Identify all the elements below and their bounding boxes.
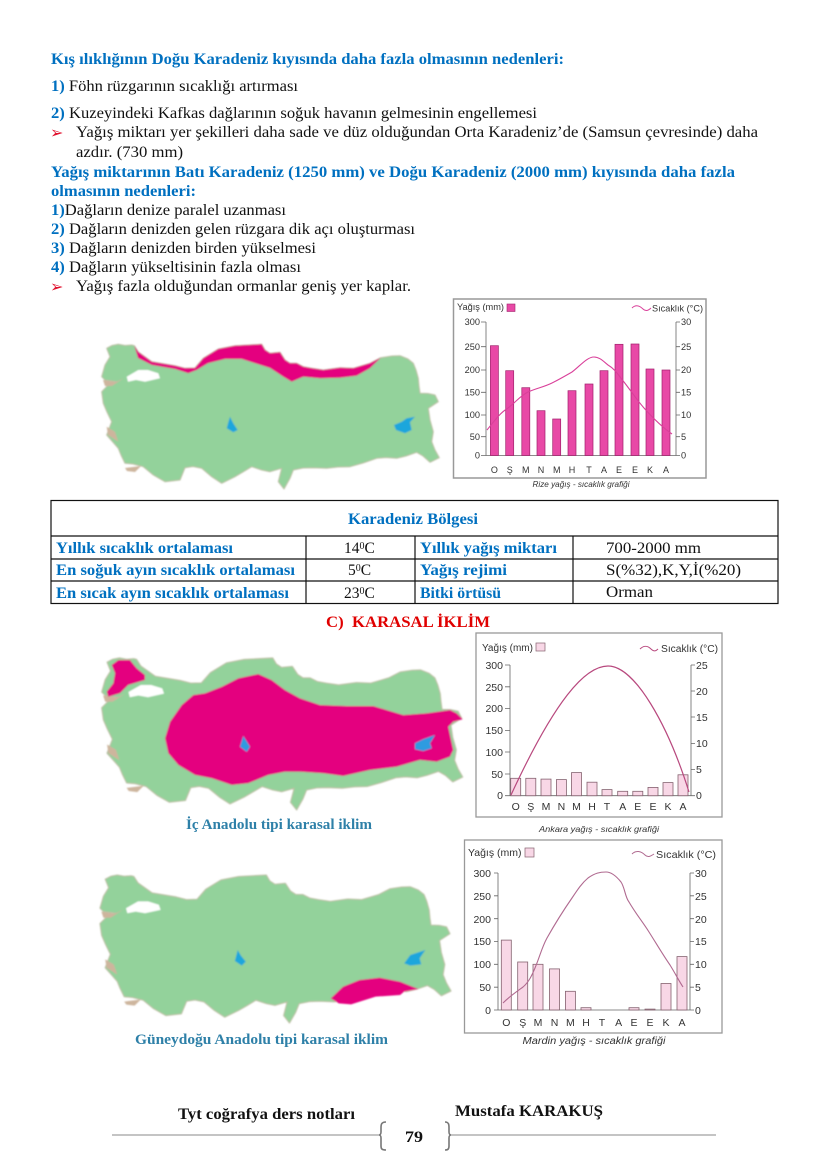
table: Karadeniz Bölgesi: 700-2000 mm: [606, 540, 701, 557]
text block: Orta Karadeniz yağış bullet: [50, 123, 758, 161]
text block: numbered reasons: 4) Dağların yükseltisinin fazla olması: [51, 259, 302, 276]
text block: numbered reasons: 1)Dağların denize paralel uzanması: [51, 202, 287, 219]
chart: Rize yağış sıcaklık grafiği: 10: [681, 410, 691, 420]
chart: Mardin yağış sıcaklık grafiği: E: [630, 1017, 638, 1029]
chart: Ankara yağış sıcaklık grafiği: A: [679, 801, 687, 813]
chart: Mardin yağış sıcaklık grafiği: A: [678, 1017, 686, 1029]
chart: Ankara yağış sıcaklık grafiği: 15: [696, 712, 708, 724]
chart: Rize yağış sıcaklık grafiği: [454, 299, 706, 489]
heading: Doğu Karadeniz kış ılıklığı: Kış ılıklığının Doğu Karadeniz kıyısında daha fazla olmasının nedenleri:: [51, 51, 564, 68]
chart: Rize yağış sıcaklık grafiği: E: [616, 465, 622, 475]
chart: Mardin yağış sıcaklık grafiği: H: [582, 1017, 590, 1029]
chart: Rize yağış sıcaklık grafiği: 30: [681, 317, 691, 327]
table: Karadeniz Bölgesi: Orman: [606, 584, 653, 601]
table: Karadeniz Bölgesi: 14: [344, 540, 360, 557]
footer: author: Mustafa KARAKUŞ: [455, 1103, 603, 1120]
chart: Rize yağış sıcaklık grafiği: Yağış (mm): [457, 302, 504, 312]
map: İç Anadolu karasal iklim: [102, 658, 463, 810]
chart: Rize yağış sıcaklık grafiği: T: [586, 465, 592, 475]
chart: Ankara yağış sıcaklık grafiği: M: [572, 801, 581, 813]
chart: Ankara yağış sıcaklık grafiği: Sıcaklık (°C): [661, 644, 718, 655]
text block: Föhn and Kafkas reasons: 2) Kuzeyindeki Kafkas dağlarının soğuk havanın gelmesinin engellemesi: [51, 105, 538, 122]
chart: Mardin yağış sıcaklık grafiği: 150: [473, 936, 491, 948]
text block: Orta Karadeniz yağış bullet: ➢: [50, 123, 63, 142]
heading: Karasal iklim: C) KARASAL İKLİM: [326, 612, 490, 631]
chart: Rize yağış sıcaklık grafiği: O: [491, 465, 498, 475]
chart: Ankara yağış sıcaklık grafiği: E: [634, 801, 641, 813]
chart: Mardin yağış sıcaklık grafiği: K: [662, 1017, 670, 1029]
chart: Ankara yağış sıcaklık grafiği: 10: [696, 738, 708, 750]
chart: Ankara yağış sıcaklık grafiği: N: [558, 801, 565, 813]
chart: Mardin yağış sıcaklık grafiği: Ş: [519, 1017, 526, 1029]
chart: Mardin yağış sıcaklık grafiği: 250: [473, 891, 491, 903]
chart: Ankara yağış sıcaklık grafiği: 20: [696, 686, 708, 698]
chart: Ankara yağış sıcaklık grafiği: K: [664, 801, 672, 813]
chart: Mardin yağış sıcaklık grafiği: M: [534, 1017, 542, 1029]
chart: Ankara yağış sıcaklık grafiği: 50: [491, 769, 503, 781]
table: Karadeniz Bölgesi: Karadeniz Bölgesi: [348, 511, 479, 528]
chart: Ankara yağış sıcaklık grafiği: M: [542, 801, 550, 813]
chart: Rize yağış sıcaklık grafiği: 50: [470, 432, 480, 442]
chart: Mardin yağış sıcaklık grafiği: 50: [479, 982, 491, 994]
table: Karadeniz Bölgesi: Yıllık sıcaklık ortalaması: [56, 540, 234, 557]
chart: Mardin yağış sıcaklık grafiği: A: [615, 1017, 622, 1029]
table: Karadeniz Bölgesi: Yıllık yağış miktarı: [420, 540, 558, 557]
table: Karadeniz Bölgesi: 0: [360, 586, 364, 597]
chart: Mardin yağış sıcaklık grafiği: 15: [695, 936, 707, 948]
chart: Mardin yağış sıcaklık grafiği: T: [599, 1017, 606, 1029]
table: Karadeniz Bölgesi: 5: [348, 562, 356, 579]
chart: Ankara yağış sıcaklık grafiği: 0: [497, 790, 503, 802]
chart: Mardin yağış sıcaklık grafiği: [464, 840, 722, 1047]
table: Karadeniz Bölgesi: Yağış rejimi: [420, 562, 508, 579]
table: Karadeniz Bölgesi: 0: [356, 563, 361, 574]
chart: Mardin yağış sıcaklık grafiği: 30: [695, 868, 707, 880]
chart: Mardin yağış sıcaklık grafiği: Mardin yağış - sıcaklık grafiği: [522, 1036, 666, 1047]
chart: Ankara yağış sıcaklık grafiği: 300: [485, 660, 503, 672]
chart: Rize yağış sıcaklık grafiği: E: [632, 465, 638, 475]
chart: Rize yağış sıcaklık grafiği: 0: [681, 450, 686, 460]
text block: Föhn and Kafkas reasons: 1) Föhn rüzgarının sıcaklığı artırması: [51, 78, 299, 95]
chart: Ankara yağış sıcaklık grafiği: 25: [696, 660, 708, 672]
table: Karadeniz Bölgesi: [51, 500, 778, 604]
text block: Orta Karadeniz yağış bullet: Yağış miktarı yer şekilleri daha sade ve düz olduğundan Orta Karadeniz’de (Samsun çevresinde) daha: [76, 124, 758, 141]
chart: Mardin yağış sıcaklık grafiği: O: [502, 1017, 510, 1029]
text block: Orta Karadeniz yağış bullet: azdır. (730 mm): [76, 144, 183, 161]
table: Karadeniz Bölgesi: C: [361, 562, 371, 579]
chart: Mardin yağış sıcaklık grafiği: Sıcaklık (°C): [656, 849, 716, 861]
chart: Mardin yağış sıcaklık grafiği: 200: [473, 914, 491, 926]
chart: Ankara yağış sıcaklık grafiği: 100: [485, 747, 503, 759]
chart: Ankara yağış sıcaklık grafiği: H: [588, 801, 596, 813]
chart: Mardin yağış sıcaklık grafiği: 25: [695, 891, 707, 903]
chart: Mardin yağış sıcaklık grafiği: N: [551, 1017, 558, 1029]
chart: Mardin yağış sıcaklık grafiği: 100: [473, 959, 491, 971]
chart: Mardin yağış sıcaklık grafiği: M: [566, 1017, 575, 1029]
footer: page number with rule: [112, 1122, 716, 1150]
text block: numbered reasons: 2) Dağların denizden gelen rüzgara dik açı oluşturması: [51, 221, 416, 238]
table: Karadeniz Bölgesi: C: [364, 585, 375, 602]
map: Güneydoğu Anadolu karasal iklim: [100, 875, 451, 1023]
chart: Rize yağış sıcaklık grafiği: Rize yağış - sıcaklık grafiği: [532, 480, 630, 489]
chart: Ankara yağış sıcaklık grafiği: 250: [485, 682, 503, 694]
caption: Güneydoğu Anadolu tipi: Güneydoğu Anadolu tipi karasal iklim: [135, 1032, 389, 1048]
text block: orman bullet: ➢: [50, 277, 63, 296]
text block: numbered reasons: [51, 202, 416, 276]
chart: Ankara yağış sıcaklık grafiği: Ş: [527, 801, 534, 813]
text block: numbered reasons: 3) Dağların denizden birden yükselmesi: [51, 240, 317, 257]
heading: Yağış miktarı nedenleri: olmasının nedenleri:: [51, 183, 196, 200]
chart: Rize yağış sıcaklık grafiği: 5: [681, 432, 686, 442]
chart: Rize yağış sıcaklık grafiği: 15: [681, 388, 691, 398]
chart: Mardin yağış sıcaklık grafiği: 5: [695, 982, 701, 994]
chart: Mardin yağış sıcaklık grafiği: 10: [695, 959, 707, 971]
chart: Ankara yağış sıcaklık grafiği: A: [619, 801, 626, 813]
table: Karadeniz Bölgesi: En sıcak ayın sıcaklık ortalaması: [56, 585, 290, 602]
chart: Mardin yağış sıcaklık grafiği: E: [646, 1017, 654, 1029]
map: Karadeniz iklimi: [102, 344, 439, 489]
chart: Rize yağış sıcaklık grafiği: 25: [681, 342, 691, 352]
chart: Rize yağış sıcaklık grafiği: 100: [465, 410, 480, 420]
chart: Ankara yağış sıcaklık grafiği: 5: [696, 764, 702, 776]
text block: orman bullet: Yağış fazla olduğundan ormanlar geniş yer kaplar.: [76, 278, 411, 295]
caption: İç Anadolu tipi: İç Anadolu tipi karasal iklim: [186, 816, 373, 833]
chart: Ankara yağış sıcaklık grafiği: 0: [696, 790, 702, 802]
chart: Rize yağış sıcaklık grafiği: 300: [465, 317, 480, 327]
chart: Rize yağış sıcaklık grafiği: M: [553, 465, 560, 475]
table: Karadeniz Bölgesi: En soğuk ayın sıcaklık ortalaması: [56, 562, 296, 579]
chart: Ankara yağış sıcaklık grafiği: O: [512, 801, 520, 813]
table: Karadeniz Bölgesi: S(%32),K,Y,İ(%20): [606, 562, 741, 579]
chart: Rize yağış sıcaklık grafiği: 20: [681, 365, 691, 375]
chart: Mardin yağış sıcaklık grafiği: Yağış (mm): [468, 847, 521, 859]
table: Karadeniz Bölgesi: C: [364, 540, 375, 557]
chart: Rize yağış sıcaklık grafiği: 0: [475, 450, 480, 460]
chart: Mardin yağış sıcaklık grafiği: 0: [695, 1005, 701, 1017]
chart: Ankara yağış sıcaklık grafiği: [476, 633, 722, 834]
chart: Ankara yağış sıcaklık grafiği: Ankara yağış - sıcaklık grafiği: [538, 824, 660, 834]
chart: Rize yağış sıcaklık grafiği: A: [663, 465, 669, 475]
text block: Föhn and Kafkas reasons: [51, 78, 538, 122]
chart: Rize yağış sıcaklık grafiği: Sıcaklık (°C): [652, 304, 703, 314]
chart: Rize yağış sıcaklık grafiği: A: [601, 465, 607, 475]
chart: Rize yağış sıcaklık grafiği: Ş: [507, 465, 513, 475]
chart: Rize yağış sıcaklık grafiği: K: [647, 465, 653, 475]
table: Karadeniz Bölgesi: Bitki örtüsü: [420, 585, 501, 602]
table: Karadeniz Bölgesi: 23: [344, 585, 360, 602]
footer: ders notları: Tyt coğrafya ders notları: [178, 1106, 356, 1123]
chart: Ankara yağış sıcaklık grafiği: E: [649, 801, 657, 813]
chart: Ankara yağış sıcaklık grafiği: T: [604, 801, 611, 813]
chart: Rize yağış sıcaklık grafiği: 250: [465, 342, 480, 352]
chart: Mardin yağış sıcaklık grafiği: 300: [473, 868, 491, 880]
chart: Rize yağış sıcaklık grafiği: M: [522, 465, 530, 475]
heading: Yağış miktarı nedenleri: Yağış miktarının Batı Karadeniz (1250 mm) ve Doğu Karadeniz (2000 mm) kıyısında daha fazla: [51, 164, 735, 181]
chart: Ankara yağış sıcaklık grafiği: Yağış (mm): [482, 643, 533, 654]
footer: page number with rule: 79: [405, 1129, 423, 1146]
heading: Yağış miktarı nedenleri: [51, 164, 735, 200]
chart: Rize yağış sıcaklık grafiği: N: [538, 465, 544, 475]
chart: Ankara yağış sıcaklık grafiği: 150: [485, 725, 503, 737]
chart: Mardin yağış sıcaklık grafiği: 0: [485, 1005, 491, 1017]
chart: Rize yağış sıcaklık grafiği: 150: [465, 388, 480, 398]
table: Karadeniz Bölgesi: 0: [360, 541, 364, 552]
chart: Ankara yağış sıcaklık grafiği: 200: [485, 703, 503, 715]
chart: Rize yağış sıcaklık grafiği: 200: [465, 365, 480, 375]
chart: Rize yağış sıcaklık grafiği: H: [569, 465, 575, 475]
chart: Mardin yağış sıcaklık grafiği: 20: [695, 914, 707, 926]
